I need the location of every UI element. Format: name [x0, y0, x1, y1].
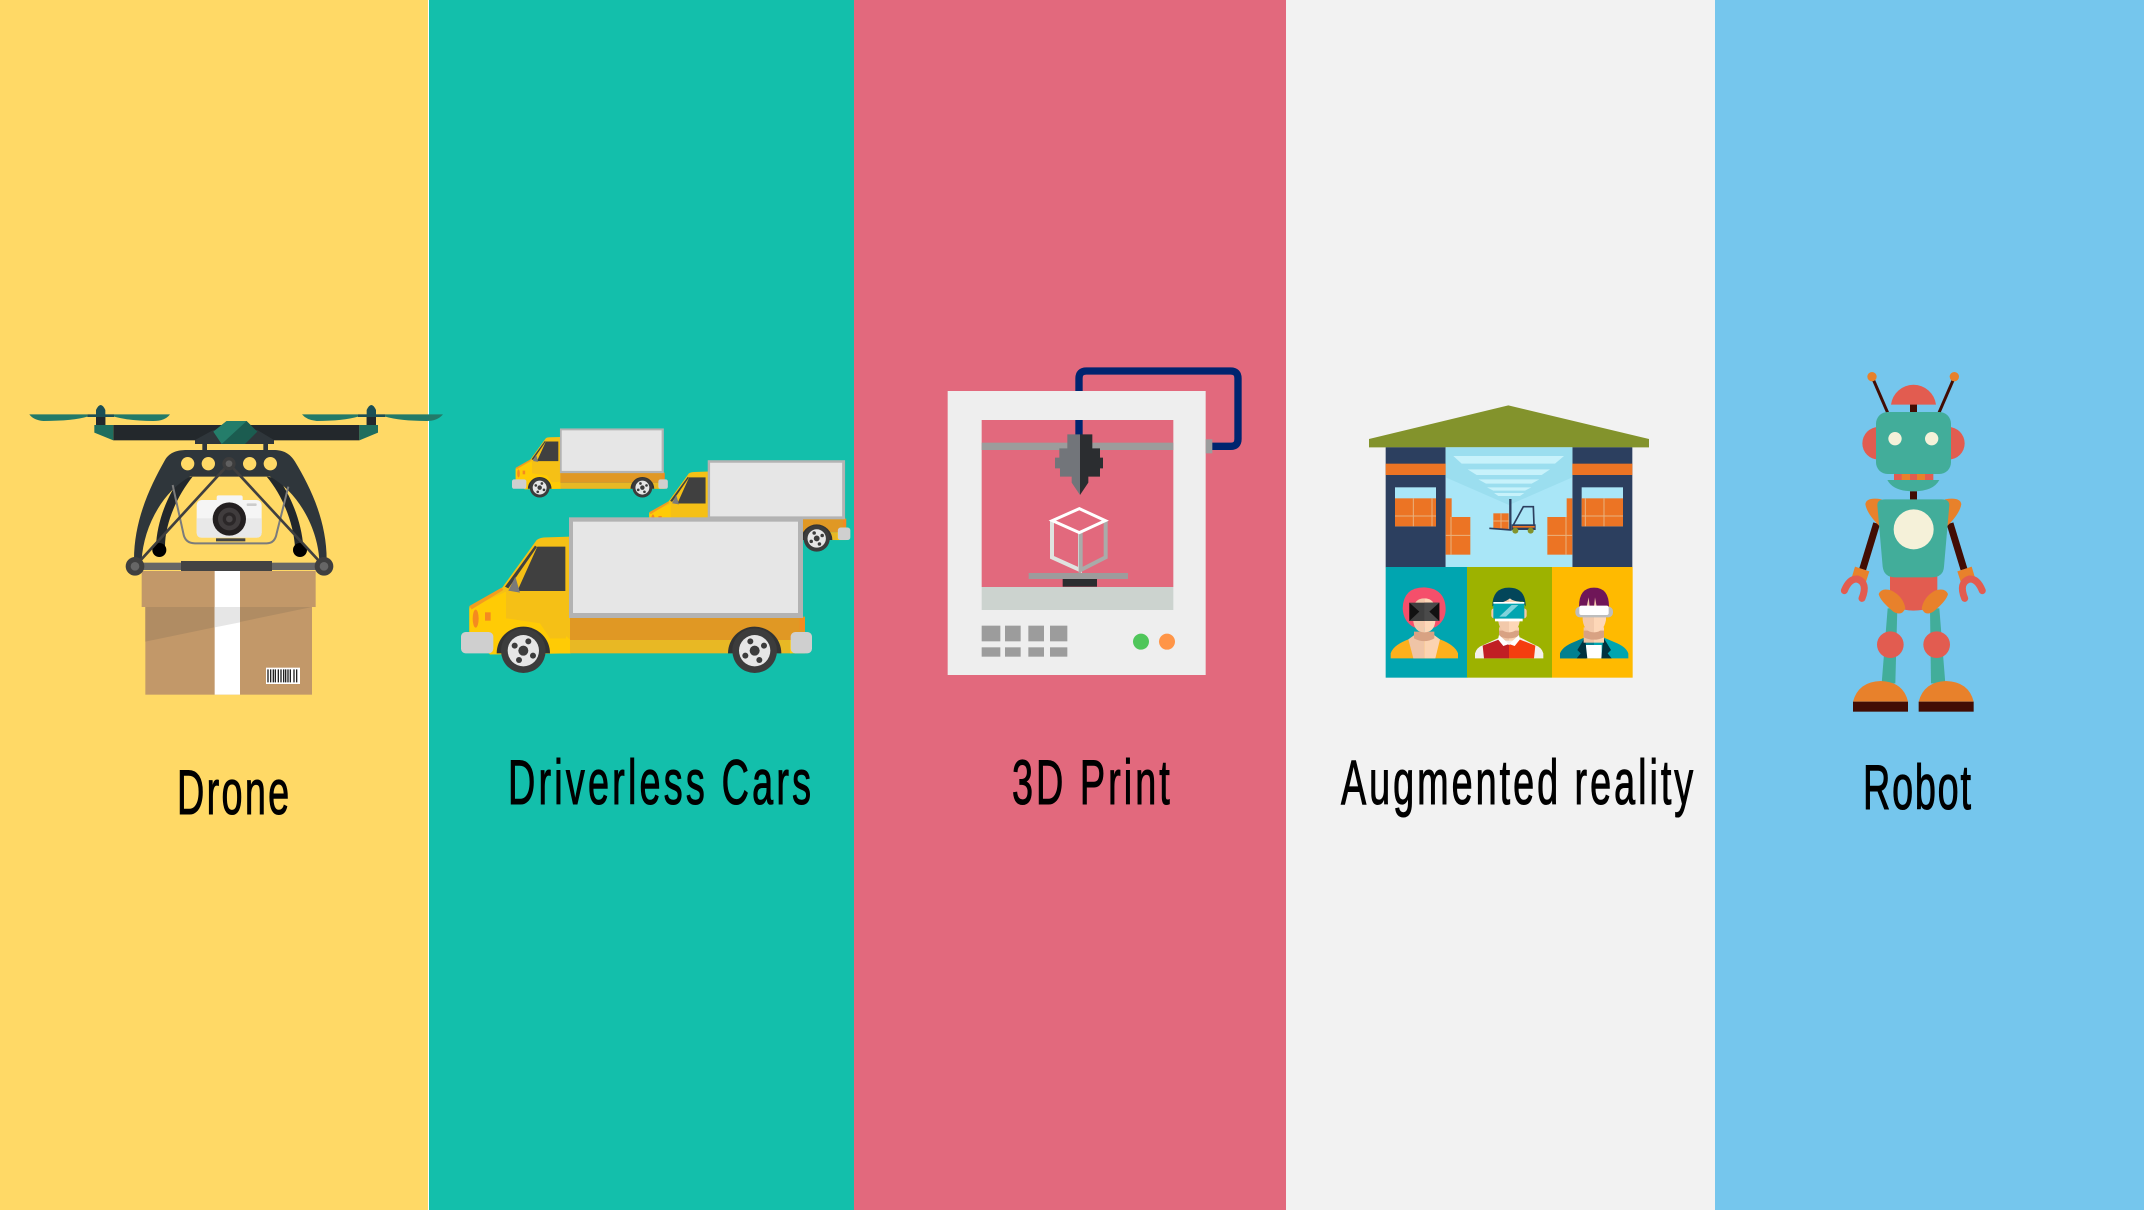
- person 3 with white headset: [1560, 588, 1628, 658]
- pelvis: [1890, 573, 1937, 611]
- inner legs: [156, 477, 193, 547]
- warehouse roof: [1369, 405, 1649, 447]
- icon: delivery drone carrying a box: [29, 405, 443, 695]
- frame: [134, 450, 327, 560]
- camera holder: [173, 485, 288, 543]
- filament tube: [1079, 371, 1238, 446]
- grip bar: [135, 563, 324, 570]
- panel: 3D print: [854, 0, 1286, 1210]
- warehouse walls: [1386, 447, 1446, 567]
- mouth: [1894, 474, 1933, 480]
- cuffs: [1852, 567, 1869, 582]
- centre body: [195, 430, 274, 444]
- heading: 3D Print: 3D Print: [1012, 748, 1170, 819]
- shelves: [1395, 487, 1436, 526]
- barcode: [266, 668, 300, 684]
- panel: robot: [1715, 0, 2144, 1210]
- arms: [1863, 523, 1964, 569]
- background tiles: [1386, 567, 1467, 678]
- person 1 with dark headset: [1391, 587, 1458, 658]
- crates: [1446, 498, 1572, 555]
- rotor hubs: [96, 405, 376, 425]
- panel: drone: [0, 0, 443, 1210]
- icon: three yellow delivery trucks: [461, 428, 850, 673]
- head: [1876, 412, 1951, 474]
- box: [145, 607, 312, 695]
- knees: [1877, 631, 1904, 658]
- printer body: [948, 391, 1206, 675]
- print head: [1055, 434, 1080, 495]
- control buttons: [982, 626, 1067, 657]
- ears: [1862, 427, 1895, 460]
- icon: robot: [1844, 372, 1982, 712]
- legs: [1882, 608, 1897, 683]
- panel: augmented reality: [1286, 0, 1715, 1210]
- feet: [1853, 681, 1908, 702]
- icon: warehouse with VR users: [1369, 405, 1649, 678]
- camera: [217, 495, 243, 505]
- shoulders: [1865, 499, 1882, 526]
- heading: Drone: Drone: [177, 758, 289, 829]
- heading: Driverless Cars: Driverless Cars: [508, 748, 811, 819]
- cables: [135, 464, 229, 566]
- propeller blades: [29, 414, 443, 421]
- printed cube: [1052, 509, 1106, 570]
- icon: 3D printer: [948, 371, 1238, 675]
- hands: [1844, 579, 1982, 598]
- person 2 with teal headset: [1475, 588, 1543, 658]
- heading: Augmented reality: Augmented reality: [1341, 748, 1693, 819]
- heading: Robot: Robot: [1863, 753, 1971, 824]
- antennas: [1872, 377, 1954, 413]
- panel: driverless cars: [429, 0, 854, 1210]
- forklift: [1489, 499, 1536, 534]
- arm: [113, 425, 359, 440]
- head dome: [1910, 403, 1917, 413]
- hip guards: [1879, 590, 1905, 614]
- torso: [1877, 499, 1949, 577]
